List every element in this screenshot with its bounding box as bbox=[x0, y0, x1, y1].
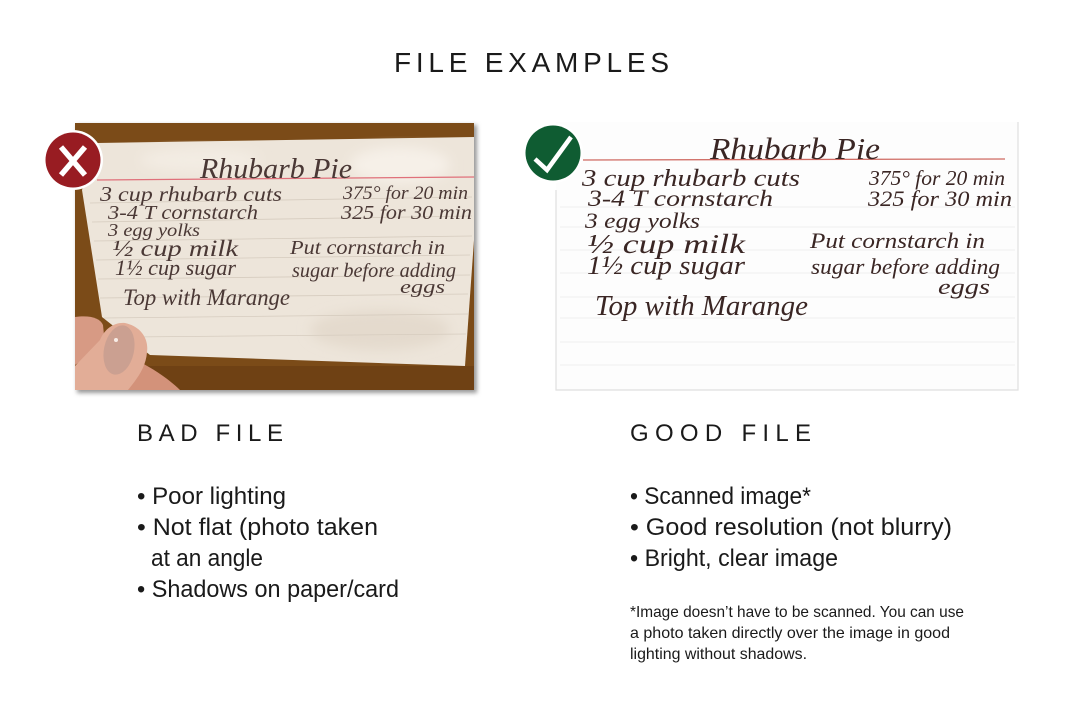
handwriting bbox=[581, 131, 1012, 322]
badge: bad X bbox=[43, 130, 103, 190]
handwriting: eggs bbox=[400, 277, 445, 298]
list: good file points bbox=[630, 483, 952, 572]
list: good file points: • Bright, clear image bbox=[630, 545, 838, 572]
handwriting: 3 cup rhubarb cuts bbox=[99, 182, 282, 206]
handwriting: Rhubarb Pie bbox=[199, 153, 352, 185]
handwriting: 3 egg yolks bbox=[584, 208, 700, 233]
handwriting bbox=[99, 153, 472, 310]
list: good file points: • Good resolution (not blurry) bbox=[630, 514, 952, 541]
handwriting: 3 egg yolks bbox=[107, 220, 200, 240]
handwriting: Top with Marange bbox=[595, 291, 808, 322]
handwriting: Top with Marange bbox=[123, 285, 290, 310]
paper card bbox=[82, 137, 474, 366]
footnote: lighting without shadows. bbox=[630, 646, 807, 663]
ruled lines bbox=[90, 197, 472, 337]
handwriting: ½ cup milk bbox=[112, 236, 239, 261]
handwriting: 375° for 20 min bbox=[868, 166, 1005, 190]
handwriting: ½ cup milk bbox=[587, 229, 746, 259]
handwriting: sugar before adding bbox=[292, 260, 456, 282]
title: FILE EXAMPLES bbox=[394, 47, 669, 78]
heading: bad file: BAD FILE bbox=[137, 420, 283, 447]
footnote: *Image doesn’t have to be scanned. You can use bbox=[630, 604, 964, 621]
handwriting: 325 for 30 min bbox=[340, 202, 472, 224]
handwriting: 3-4 T cornstarch bbox=[107, 202, 258, 224]
red rule bbox=[97, 177, 474, 180]
handwriting: 3 cup rhubarb cuts bbox=[581, 166, 800, 192]
badge: good check bbox=[523, 123, 583, 183]
handwriting: 3-4 T cornstarch bbox=[587, 186, 773, 211]
list: bad file points: at an angle bbox=[151, 545, 263, 572]
hand bbox=[75, 316, 180, 390]
handwriting: Put cornstarch in bbox=[289, 237, 445, 259]
panel: bad file photo bbox=[75, 123, 477, 393]
handwriting: 325 for 30 min bbox=[867, 186, 1012, 211]
handwriting: Rhubarb Pie bbox=[709, 131, 880, 166]
handwriting: 375° for 20 min bbox=[342, 183, 468, 204]
handwriting: 1½ cup sugar bbox=[115, 255, 236, 280]
footnote bbox=[630, 604, 964, 663]
list: good file points: • Scanned image* bbox=[630, 483, 811, 510]
ruled lines bbox=[560, 207, 1015, 365]
handwriting: eggs bbox=[938, 274, 990, 299]
red rule bbox=[583, 159, 1005, 160]
panel: good file scan bbox=[556, 122, 1018, 390]
list: bad file points bbox=[137, 483, 399, 603]
list: bad file points: • Poor lighting bbox=[137, 483, 286, 510]
handwriting: Put cornstarch in bbox=[809, 228, 985, 253]
list: bad file points: • Not flat (photo taken bbox=[137, 514, 378, 541]
footnote: a photo taken directly over the image in good bbox=[630, 625, 950, 642]
handwriting: sugar before adding bbox=[811, 254, 1000, 279]
list: bad file points: • Shadows on paper/card bbox=[137, 576, 399, 603]
handwriting: 1½ cup sugar bbox=[587, 251, 746, 280]
heading: good file: GOOD FILE bbox=[630, 420, 811, 447]
